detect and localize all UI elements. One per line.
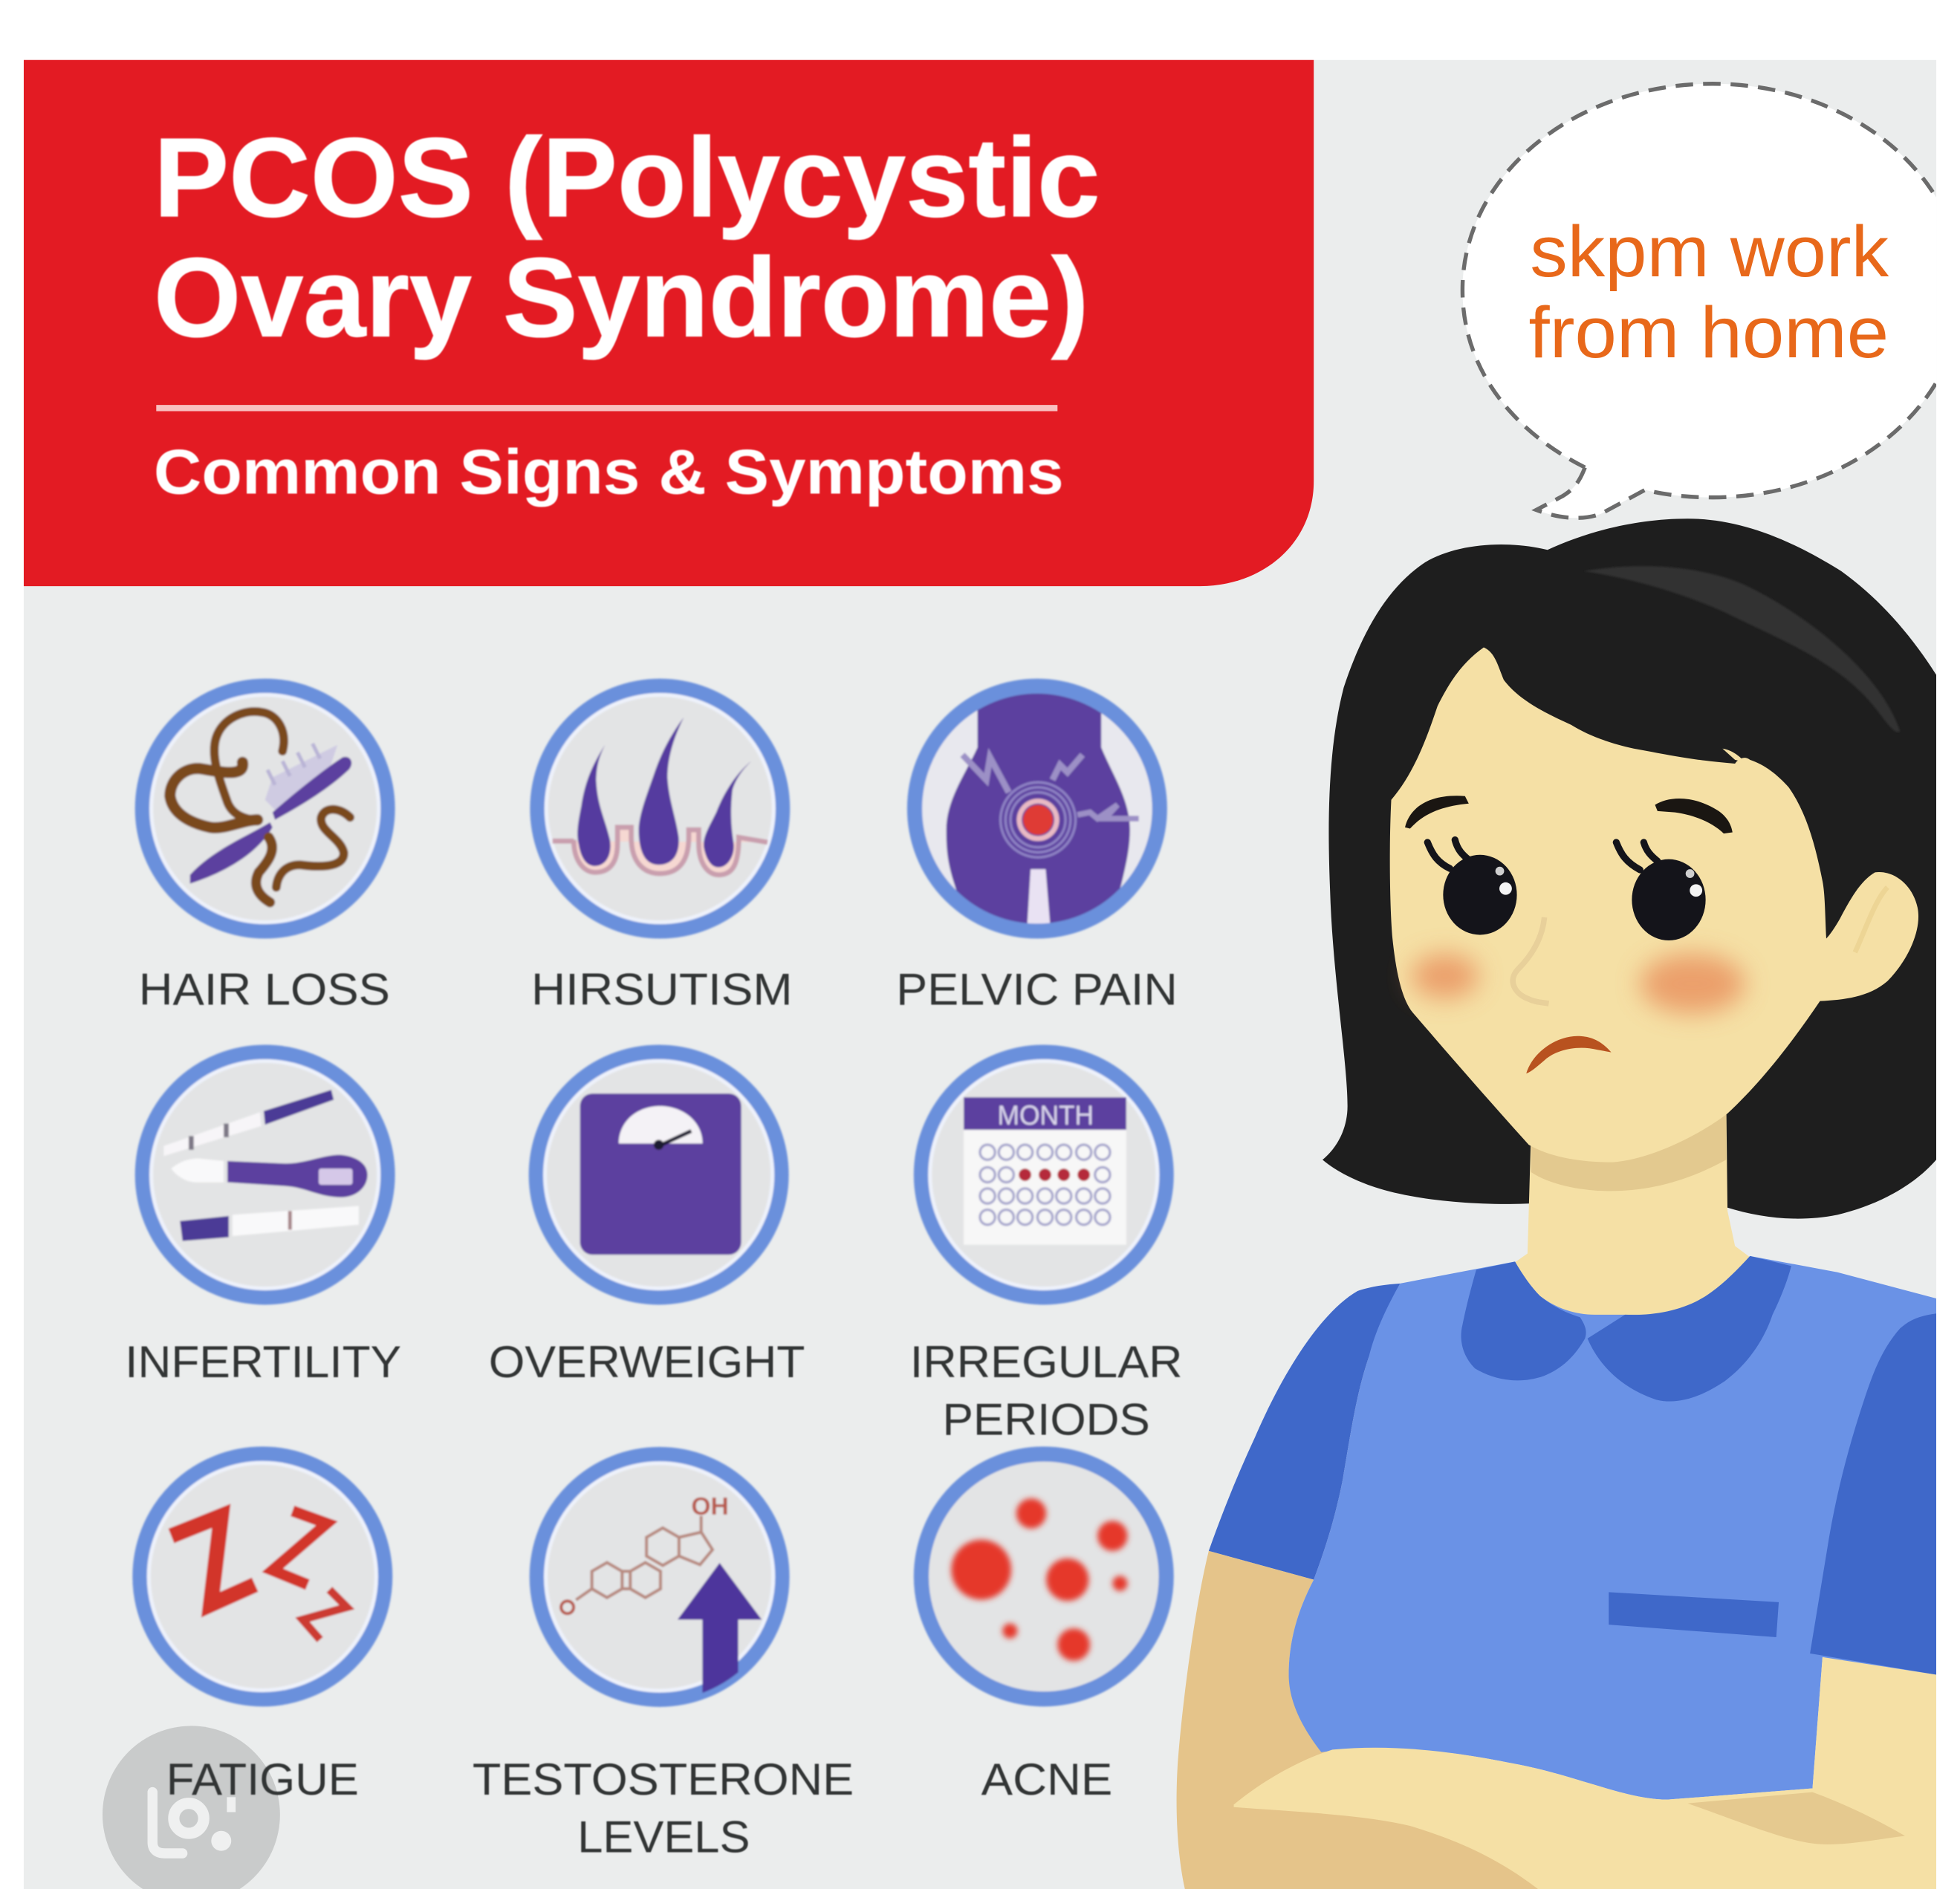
label: infertility: INFERTILITY xyxy=(125,1336,401,1387)
pocket xyxy=(1609,1592,1779,1637)
title xyxy=(154,115,1100,361)
eye left xyxy=(1427,840,1517,934)
banner shape xyxy=(24,60,1314,586)
eyebrow left xyxy=(1405,796,1469,828)
label: irregular periods xyxy=(910,1336,1183,1444)
upper arm xyxy=(1177,1551,1625,1889)
left sleeve xyxy=(1209,1284,1400,1580)
icon: irregular periods calendar: MONTH xyxy=(998,1099,1094,1131)
eye right xyxy=(1616,842,1706,940)
shirt body xyxy=(1289,1256,1936,1800)
title: Ovary Syndrome) xyxy=(154,235,1088,361)
right sleeve xyxy=(1810,1313,1936,1674)
collar left xyxy=(1461,1261,1586,1380)
neck shadow xyxy=(1531,1114,1727,1191)
icon: overweight scale xyxy=(536,1053,781,1297)
illustration: worried woman xyxy=(1177,518,1936,1889)
face xyxy=(1390,648,1918,1163)
icon: irregular periods calendar xyxy=(921,1053,1166,1297)
icon: acne xyxy=(921,1454,1166,1699)
header banner xyxy=(24,60,1314,586)
eyebrow right xyxy=(1655,799,1733,833)
speech bubble: from home xyxy=(1529,292,1889,373)
label: pelvic pain: PELVIC PAIN xyxy=(896,964,1178,1015)
watermark: lens badge xyxy=(103,1726,280,1889)
icon: hirsutism xyxy=(537,686,782,931)
label: overweight: OVERWEIGHT xyxy=(489,1336,805,1387)
blush left xyxy=(1411,954,1479,998)
mouth xyxy=(1526,1036,1612,1073)
label: acne: ACNE xyxy=(981,1754,1112,1804)
nose xyxy=(1513,917,1548,1004)
collar right xyxy=(1588,1256,1791,1402)
hair xyxy=(1323,518,1936,1219)
forearm xyxy=(1234,1657,1936,1889)
label: testosterone levels: TESTOSTERONE xyxy=(473,1754,854,1804)
icon: fatigue xyxy=(140,1454,385,1699)
label: testosterone levels: LEVELS xyxy=(577,1811,750,1862)
bubble outline xyxy=(1462,84,1960,518)
label: testosterone levels xyxy=(473,1754,854,1862)
icon: infertility xyxy=(143,1053,388,1297)
subtitle: Common Signs & Symptoms xyxy=(154,437,1064,508)
icon: testosterone levels: OH xyxy=(691,1493,729,1521)
title: PCOS (Polycystic xyxy=(154,115,1100,241)
icon: hair loss xyxy=(143,686,388,931)
label: irregular periods: PERIODS xyxy=(943,1394,1150,1444)
forearm shadow xyxy=(1687,1792,1905,1844)
icon: pelvic pain xyxy=(915,681,1160,950)
blush right xyxy=(1640,954,1745,1013)
label: hair loss: HAIR LOSS xyxy=(139,964,390,1015)
speech bubble xyxy=(1462,84,1960,518)
icon: testosterone levels xyxy=(537,1454,782,1706)
ear detail xyxy=(1855,888,1887,952)
label: fatigue: FATIGUE xyxy=(166,1754,359,1804)
bubble text: skpm work xyxy=(1530,211,1889,292)
hair highlight xyxy=(1584,566,1900,732)
label: hirsutism: HIRSUTISM xyxy=(531,964,793,1015)
label: irregular periods: IRREGULAR xyxy=(910,1336,1183,1387)
divider xyxy=(156,405,1057,412)
fringe tip xyxy=(1722,749,1742,761)
neck xyxy=(1516,1114,1749,1315)
